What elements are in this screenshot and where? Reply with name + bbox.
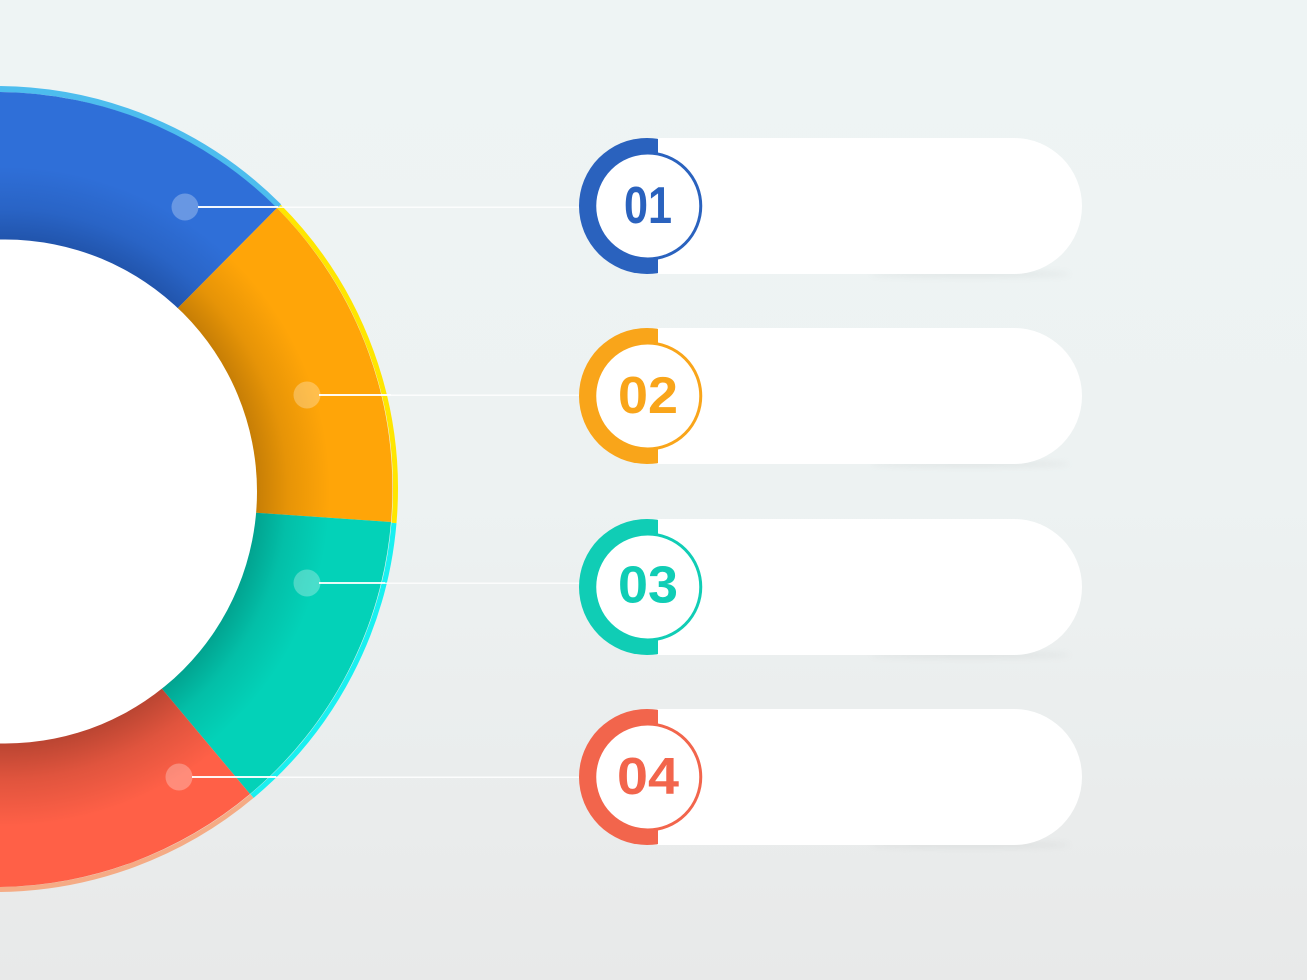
segment 4: red <box>0 600 252 890</box>
connector 4 <box>166 764 580 790</box>
item 04 <box>579 709 1082 848</box>
center white circle <box>0 240 257 744</box>
number badge 03 <box>579 519 715 655</box>
number badge 02: 02 <box>618 367 678 425</box>
item 03 <box>579 519 1082 658</box>
number badge 03: 03 <box>618 556 678 614</box>
number badge 01: 01 <box>624 177 672 235</box>
segment 2: orange <box>170 206 395 523</box>
label pill 04 <box>657 709 1082 845</box>
segment 3: teal <box>155 512 394 796</box>
number badge 04: 04 <box>617 748 679 806</box>
label pill 01 <box>657 138 1082 274</box>
label pill 02 <box>657 328 1082 464</box>
donut chart <box>0 89 395 890</box>
connector 3 <box>294 570 580 596</box>
item 02 <box>579 328 1082 466</box>
item 01 <box>579 138 1082 276</box>
connector 1 <box>172 194 580 220</box>
number badge 02 <box>579 328 715 464</box>
connector 2 <box>294 382 580 408</box>
segment 1: blue <box>0 89 279 400</box>
number badge 04 <box>579 709 715 845</box>
number badge 01 <box>579 138 715 274</box>
label pill 03 <box>657 519 1082 655</box>
